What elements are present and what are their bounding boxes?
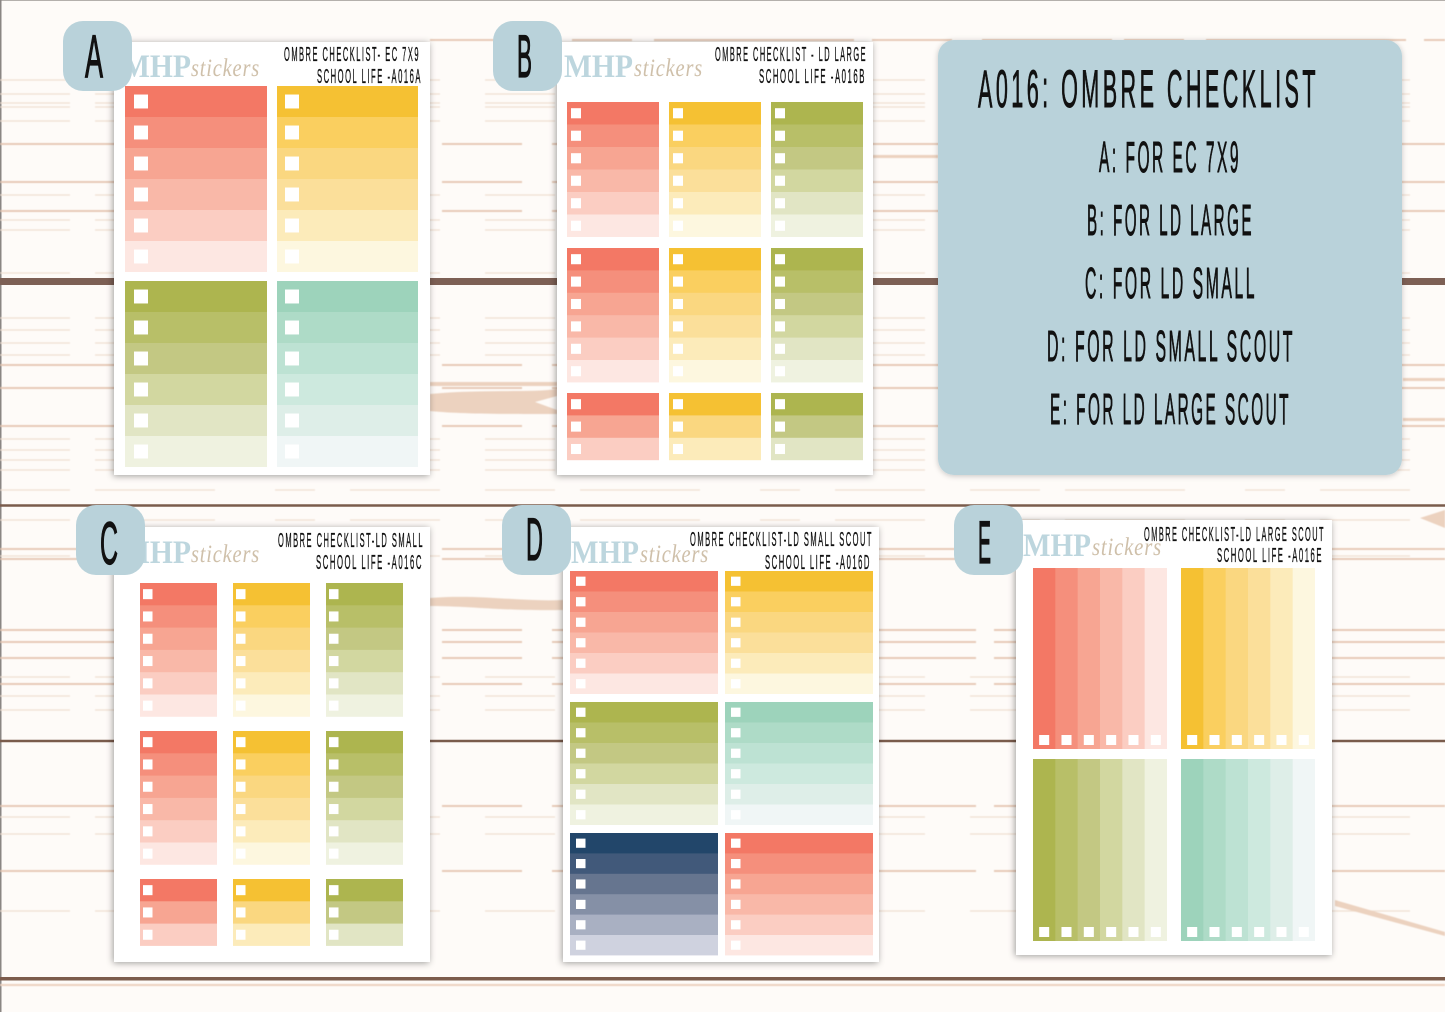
sticker sheet D [563, 527, 879, 962]
checklist blocks D [570, 571, 873, 955]
badge E: E [978, 509, 991, 576]
logo D [571, 535, 709, 571]
text: OMBRE CHECKLIST-LD SMALL [278, 530, 424, 552]
logo E [1023, 528, 1162, 564]
text: SCHOOL LIFE -A016C [316, 552, 423, 574]
logo E: MHP [1023, 528, 1091, 564]
sticker sheet B [557, 42, 873, 475]
checklist blocks C [140, 583, 403, 946]
logo B: MHP [564, 49, 633, 85]
logo D: stickers [640, 541, 709, 568]
text: SCHOOL LIFE -A016A [317, 66, 422, 88]
badge C: C [100, 510, 118, 577]
logo A: stickers [191, 55, 260, 82]
text: SCHOOL LIFE -A016B [759, 66, 866, 88]
badge C [76, 505, 145, 577]
sheet title E [1144, 524, 1325, 567]
logo C: stickers [191, 541, 260, 568]
checklist blocks A [125, 86, 418, 467]
logo E: stickers [1092, 534, 1162, 561]
sticker sheet A [114, 42, 430, 475]
badge E [954, 505, 1023, 576]
logo C: MHP [122, 535, 191, 571]
badge B [493, 21, 562, 91]
sheet title A [284, 44, 422, 88]
logo B: stickers [634, 55, 703, 82]
badge D [502, 505, 571, 575]
info panel [938, 40, 1402, 475]
text: OMBRE CHECKLIST- EC 7X9 [284, 44, 420, 66]
badge A [63, 21, 132, 91]
sheet title D [690, 529, 873, 574]
badge D: D [526, 506, 543, 573]
logo B [564, 49, 703, 85]
logo D: MHP [571, 535, 639, 571]
sticker sheet C [114, 527, 430, 962]
sheet title C [278, 530, 424, 574]
checklist blocks B [567, 102, 863, 460]
text: SCHOOL LIFE -A016D [765, 552, 871, 574]
sticker sheet E [1016, 520, 1332, 955]
text: OMBRE CHECKLIST - LD LARGE [715, 44, 867, 66]
vertical checklist blocks E [1033, 568, 1315, 941]
badge A: A [85, 23, 103, 90]
badge B: B [517, 23, 532, 90]
logo A [122, 49, 260, 85]
text: OMBRE CHECKLIST-LD SMALL SCOUT [690, 529, 873, 551]
sheet title B [715, 44, 867, 88]
logo C [122, 535, 260, 571]
logo A: MHP [122, 49, 191, 85]
